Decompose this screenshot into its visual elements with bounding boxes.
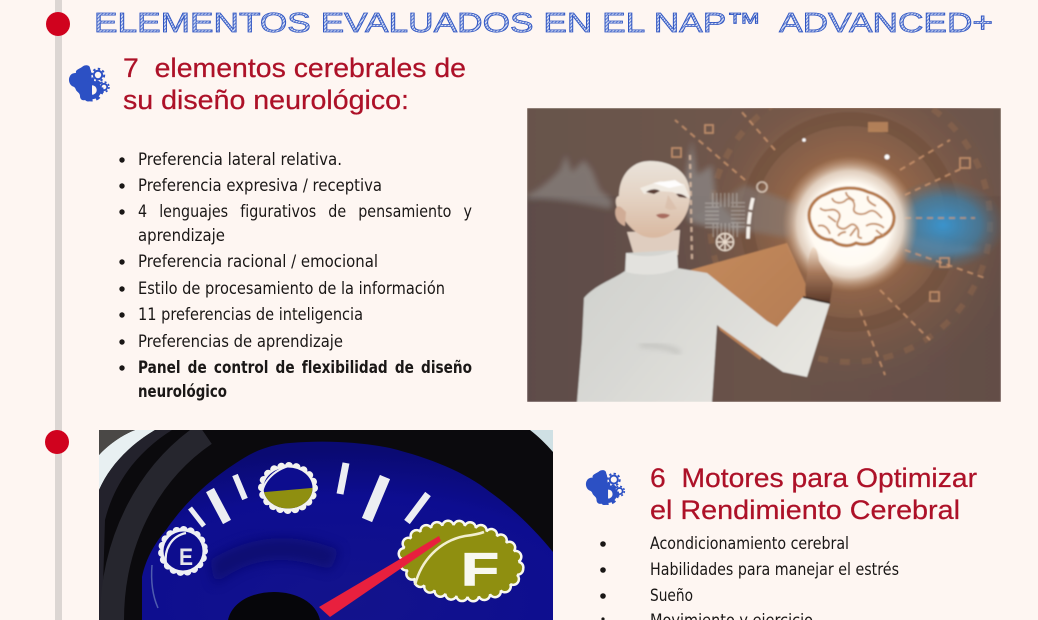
neck [627, 230, 680, 255]
list: brain design elements: Preferencia expresiva / receptiva [138, 176, 382, 196]
list: brain design elements: Panel de control de flexibilidad de diseño [138, 358, 472, 378]
heading: 6 motores [651, 467, 977, 520]
list: brain design elements: Estilo de procesamiento de la información [138, 279, 445, 299]
heading: 6 motores: 6 Motores para Optimizar [650, 463, 977, 493]
binary data rays [675, 110, 985, 375]
hand [805, 247, 833, 303]
list: brain motors: Habilidades para manejar el estrés [650, 560, 899, 580]
icon: full brain F [399, 518, 523, 604]
timeline marker: bottom [45, 430, 69, 454]
list: brain design elements: Preferencias de aprendizaje [138, 332, 343, 352]
list: brain motors: Acondicionamiento cerebral [650, 534, 849, 554]
visor [640, 181, 690, 198]
woman [577, 161, 833, 402]
list: brain design elements: 11 preferencias de inteligencia [138, 305, 363, 325]
heading: 6 motores: el Rendimiento Cerebral [650, 495, 960, 525]
photo: woman touching glowing brain [527, 108, 1001, 402]
title: ELEMENTOS EVALUADOS EN EL NAP™ ADVANCED+ [94, 7, 993, 38]
dial streaks [210, 538, 340, 585]
icon: empty brain E: E [179, 544, 193, 571]
list: brain motors: Sueño [650, 586, 693, 606]
white arc ticks [748, 198, 753, 240]
grey data spikes [685, 140, 745, 232]
list: brain design elements: 4 lenguajes figurativos de pensamiento y [138, 202, 472, 222]
glowing orb [782, 156, 918, 292]
grey beam [688, 185, 800, 238]
orange wedge [690, 243, 813, 360]
turtleneck collar [626, 250, 678, 275]
icon: brain with gears [586, 470, 624, 505]
sweater [577, 250, 830, 402]
chrome bezel [99, 430, 155, 490]
needle [319, 536, 441, 617]
blue dial [142, 442, 553, 620]
list: brain design elements: neurológico [138, 382, 227, 402]
upper tint [527, 108, 1001, 196]
heading: 7 elementos: su diseño neurológico: [123, 85, 409, 115]
icon: half brain [262, 465, 314, 510]
section: motors [586, 463, 977, 620]
photo: fuel gauge [99, 430, 553, 620]
warm rings [719, 108, 1001, 354]
brain outline [809, 188, 894, 246]
list: brain design elements: aprendizaje [138, 226, 225, 246]
head [616, 161, 690, 238]
timeline marker: top [46, 12, 70, 36]
globe icon [716, 233, 734, 251]
icon: full brain F: F [461, 543, 499, 595]
timeline bar [55, 0, 62, 620]
list: brain design elements [119, 150, 472, 402]
icon: brain with gears [69, 65, 109, 102]
gauge ticks [190, 463, 428, 526]
icon: empty brain E [162, 530, 204, 572]
list: brain design elements: Preferencia lateral relativa. [138, 150, 342, 170]
blue glow [902, 181, 1000, 268]
heading: 7 elementos: 7 elementos cerebrales de [123, 53, 466, 83]
list: brain motors [600, 534, 899, 620]
heading: 7 elementos [123, 53, 466, 115]
data chart haze [527, 155, 612, 209]
needle hub [228, 592, 320, 620]
dot matrix [712, 200, 738, 230]
section: brain elements [69, 53, 472, 402]
orb sparks [884, 154, 890, 160]
list: brain design elements: Preferencia racional / emocional [138, 252, 378, 272]
